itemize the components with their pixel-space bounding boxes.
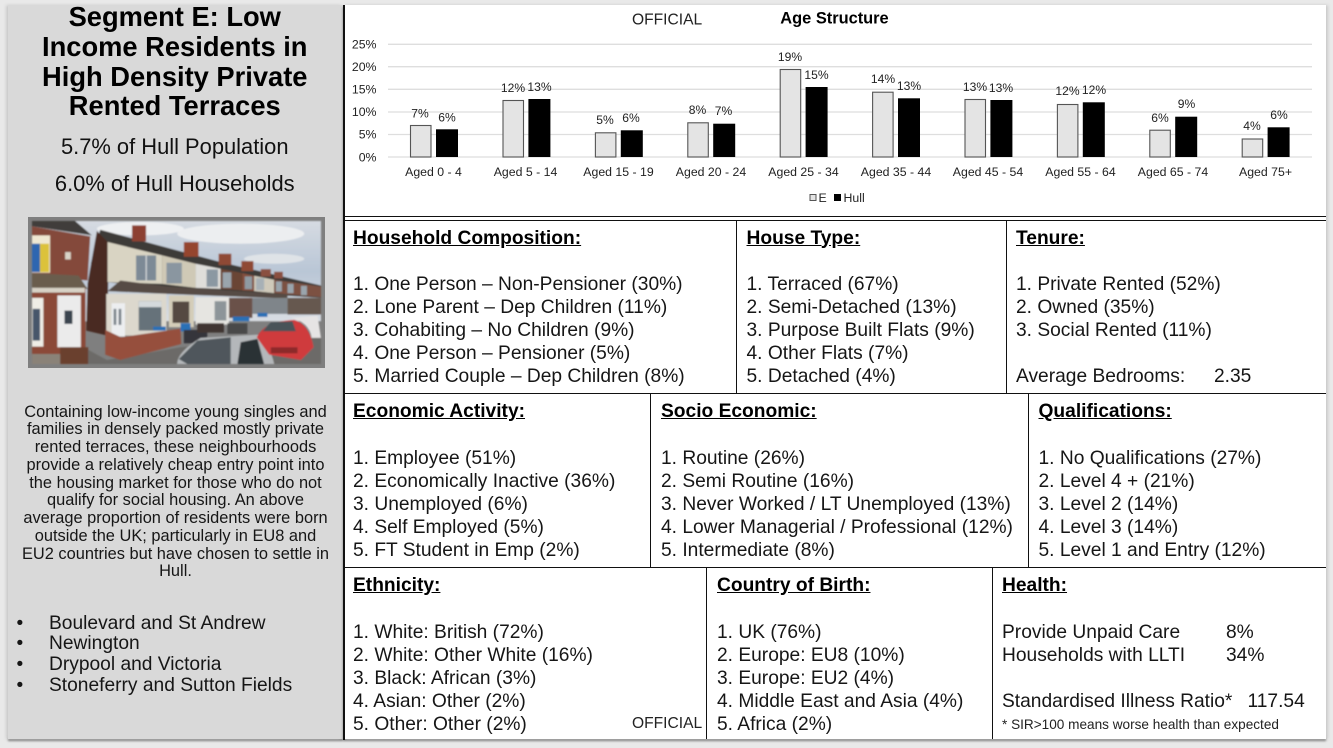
description: families in densely packed mostly private — [27, 420, 324, 438]
panel: segment summary sidebar — [8, 5, 343, 739]
panel: country of birth: Country of Birth: — [717, 575, 870, 596]
unpaid care: Provide Unpaid Care — [1002, 622, 1180, 642]
y axis labels: 25% — [352, 38, 377, 52]
households with LLTI: Households with LLTI — [1002, 644, 1185, 666]
bars: Hull — [436, 87, 1290, 157]
chart title: Age Structure — [780, 10, 889, 28]
panel: health: 8% — [1226, 622, 1254, 642]
panel: qualifications: 1. No Qualifications (27%) 2. Level 4 + (21%) 3. Level 2 (14%) 4. Level 3 (14%) 5. Level 1 and Entry (12%) — [1038, 448, 1266, 561]
description: average proportion of residents were born — [23, 509, 328, 527]
household share: 6.0% of Hull Households — [55, 171, 295, 196]
data labels: 4% — [1243, 119, 1261, 133]
ward list — [16, 613, 292, 696]
ward list: • — [16, 675, 23, 696]
x axis labels: Aged 25 - 34 — [768, 165, 839, 179]
x axis labels: Aged 0 - 4 — [405, 165, 462, 179]
legend: E — [818, 191, 827, 205]
bars: segment E — [410, 70, 1263, 157]
road — [32, 337, 321, 364]
data labels: 12% — [1055, 84, 1080, 98]
data labels: 19% — [778, 50, 802, 64]
panel: economic activity: 1. Employee (51%) 2. Economically Inactive (36%) 3. Unemployed (6%) 4. Self Employed (5%) 5. FT Student in Emp (2%) — [353, 448, 615, 561]
data labels: 6% — [438, 110, 456, 124]
ward list: Newington — [49, 633, 140, 654]
description: Hull. — [159, 562, 192, 580]
x axis labels: Aged 20 - 24 — [676, 165, 746, 179]
data labels: 13% — [989, 81, 1013, 95]
panel: economic activity: Economic Activity: — [353, 401, 525, 422]
official marking bottom: OFFICIAL — [632, 715, 702, 732]
description: qualify for social housing. An above — [47, 491, 304, 509]
x axis labels: Aged 55 - 64 — [1045, 165, 1116, 179]
x axis labels: Aged 35 - 44 — [861, 165, 931, 179]
ward list: Boulevard and St Andrew — [49, 613, 266, 634]
data labels: 13% — [897, 79, 921, 93]
y axis labels: 0% — [359, 150, 377, 164]
x axis labels: Aged 75+ — [1239, 165, 1292, 179]
x axis labels: Aged 45 - 54 — [953, 165, 1023, 179]
data labels: 7% — [715, 104, 732, 118]
ward list: • — [16, 613, 23, 634]
description: rented terraces, these neighbourhoods — [35, 438, 316, 456]
x axis labels — [405, 165, 1292, 179]
data labels: 14% — [871, 72, 895, 86]
legend: Hull — [844, 191, 865, 205]
x axis labels: Aged 65 - 74 — [1138, 165, 1208, 179]
description — [22, 402, 329, 580]
ward list: • — [16, 654, 23, 675]
panel: qualifications: Qualifications: — [1038, 401, 1172, 422]
title: High Density Private — [42, 61, 307, 92]
description: Containing low-income young singles and — [24, 402, 327, 420]
far terrace — [91, 230, 321, 298]
data labels: 9% — [1178, 97, 1195, 111]
x axis labels: Aged 15 - 19 — [583, 165, 654, 179]
description: provide a relatively cheap entry point into — [27, 456, 324, 474]
data labels: 6% — [622, 111, 640, 125]
panel: socio economic: 1. Routine (26%) 2. Semi Routine (16%) 3. Never Worked / LT Unemployed (13%) 4. Lower Managerial / Professional (12%) 5. Intermediate (8%) — [661, 448, 1013, 561]
data labels: 12% — [1082, 83, 1106, 97]
panel: tenure: Tenure: 1. Private Rented (52%) 2. Owned (35%) 3. Social Rented (11%) 2.35 — [1016, 228, 1251, 387]
title: Segment E: Low — [69, 1, 281, 32]
ward list: Drypool and Victoria — [49, 654, 221, 675]
ward list: Stoneferry and Sutton Fields — [49, 675, 292, 696]
panel: tenure: Average Bedrooms: — [1016, 366, 1185, 387]
photo: terraced street — [28, 217, 325, 368]
title — [42, 1, 307, 121]
panel: health: 34% — [1226, 644, 1264, 666]
standardised illness ratio: Standardised Illness Ratio* — [1002, 691, 1232, 712]
panel: main white area — [343, 5, 1326, 739]
official marking top: OFFICIAL — [632, 12, 703, 28]
data labels: 15% — [804, 68, 829, 82]
y axis labels: 15% — [352, 82, 377, 96]
description: outside the UK; particularly in EU8 and — [35, 527, 316, 545]
chart: age structure — [352, 10, 1312, 205]
panel: country of birth: 1. UK (76%) 2. Europe: EU8 (10%) 3. Europe: EU2 (4%) 4. Middle East and Asia (4%) 5. Africa (2%) — [717, 622, 963, 735]
data labels: 13% — [527, 80, 552, 94]
data labels: 12% — [501, 81, 525, 95]
cars — [177, 335, 274, 364]
left house — [32, 221, 92, 235]
data labels: 8% — [689, 103, 706, 117]
data labels: 7% — [411, 106, 429, 120]
health heading: Health: — [1002, 575, 1067, 596]
ward list: • — [16, 633, 23, 654]
panel: ethnicity: Ethnicity: — [353, 575, 440, 596]
data labels: 6% — [1270, 108, 1288, 122]
description: EU2 countries but have chosen to settle in — [22, 544, 329, 562]
data labels: 5% — [596, 113, 614, 127]
y axis labels — [352, 38, 377, 164]
y axis labels: 5% — [359, 128, 377, 142]
panel: socio economic: Socio Economic: — [661, 401, 817, 422]
panel: health — [1002, 575, 1305, 732]
description: the housing market for those who do not — [29, 474, 322, 492]
legend — [810, 191, 865, 205]
panel: ethnicity: 1. White: British (72%) 2. White: Other White (16%) 3. Black: African (3%) 4. Asian: Other (2%) 5. Other: Other (2%) — [353, 622, 593, 735]
data labels: 6% — [1151, 111, 1169, 125]
footnote: * SIR>100 means worse health than expected — [1002, 717, 1279, 732]
data labels: 13% — [963, 80, 987, 94]
title: Rented Terraces — [69, 90, 281, 121]
x axis labels: Aged 5 - 14 — [494, 165, 557, 179]
panel: household composition: Household Composition: 1. One Person – Non-Pensioner (30%) 2. Lone Parent – Dep Children (11%) 3. Cohabiting – No Children (9%) 4. One Person – Pensioner (5%) 5. Married Couple – Dep Children (8%) — [353, 228, 685, 387]
y axis labels: 10% — [352, 105, 377, 119]
y axis labels: 20% — [352, 60, 377, 74]
data labels — [411, 50, 1288, 133]
population share: 5.7% of Hull Population — [61, 134, 289, 159]
panel: health: 117.54 — [1248, 691, 1305, 712]
title: Income Residents in — [42, 31, 307, 62]
panel: house type: House Type: 1. Terraced (67%) 2. Semi-Detached (13%) 3. Purpose Built Flats (9%) 4. Other Flats (7%) 5. Detached (4%) — [746, 228, 975, 387]
